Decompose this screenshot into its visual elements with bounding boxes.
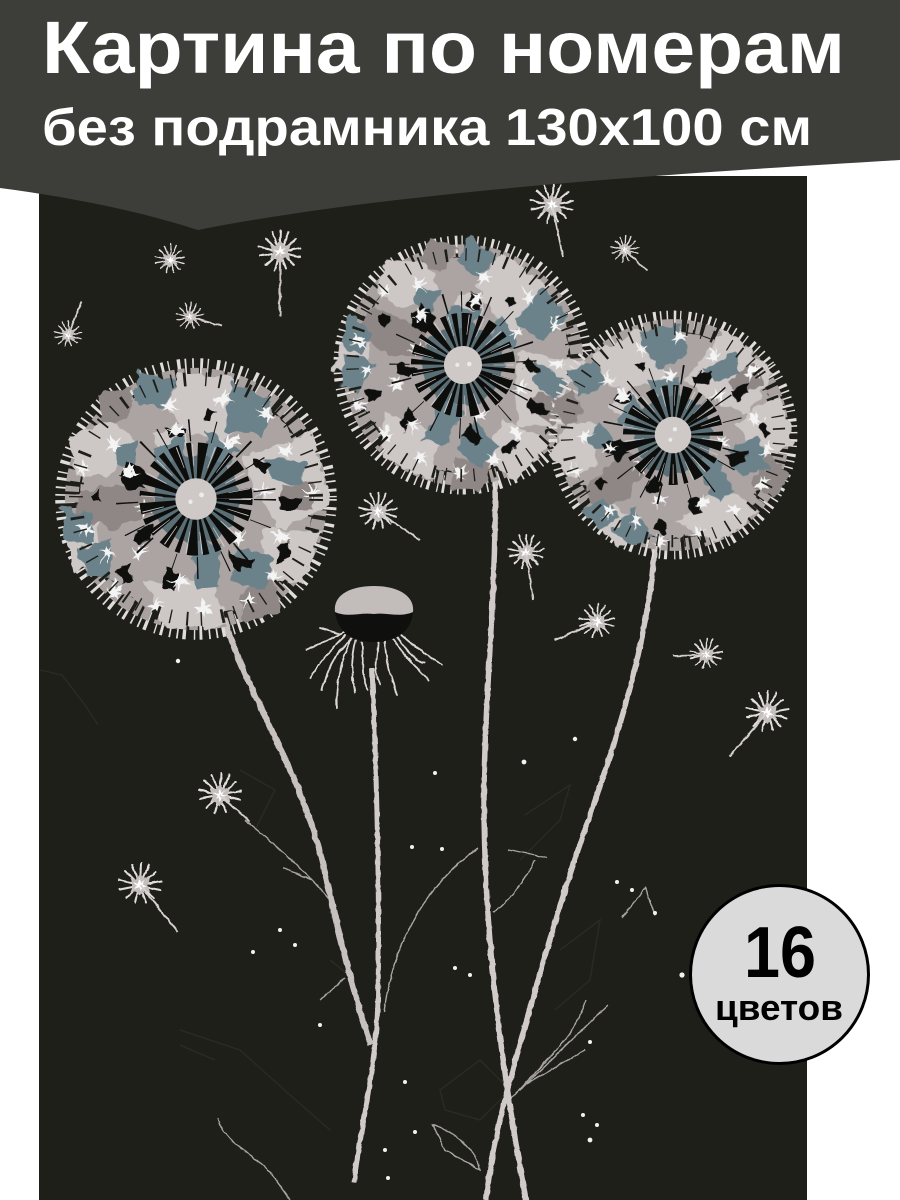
seed lower left <box>199 773 250 822</box>
header banner <box>0 0 900 230</box>
badge number: 16 <box>744 913 816 993</box>
seed with long stem <box>259 230 301 316</box>
faint background leaves <box>40 670 600 1130</box>
seed top centre <box>531 183 573 257</box>
seed right of middle stem <box>555 603 615 640</box>
seed top right <box>611 236 647 271</box>
seed small top left <box>155 245 185 273</box>
seed right <box>673 638 722 668</box>
small closed dandelion <box>306 586 442 708</box>
seed far left <box>54 302 82 347</box>
title: Картина по номерам <box>42 6 845 89</box>
subtitle: без подрамника 130х100 см <box>42 99 812 157</box>
dandelion head: left <box>61 368 330 630</box>
seed lowest left <box>119 863 178 932</box>
seed centre <box>359 492 420 540</box>
stem: middle dandelion <box>484 478 526 1200</box>
thin branches <box>218 820 655 1200</box>
seed under top left <box>176 303 222 329</box>
badge: 16 colours <box>690 886 868 1064</box>
seed far right <box>730 691 788 756</box>
artwork background <box>39 176 807 1200</box>
stem: left dandelion <box>224 618 371 1045</box>
stem: right dandelion <box>486 545 655 1200</box>
scattered white dots <box>176 659 685 1180</box>
badge label: цветов <box>715 987 843 1028</box>
dandelion head: right <box>509 272 836 599</box>
seed near middle stem <box>508 534 544 600</box>
stem: small dandelion <box>354 668 379 1182</box>
dandelion head: middle <box>296 200 628 529</box>
